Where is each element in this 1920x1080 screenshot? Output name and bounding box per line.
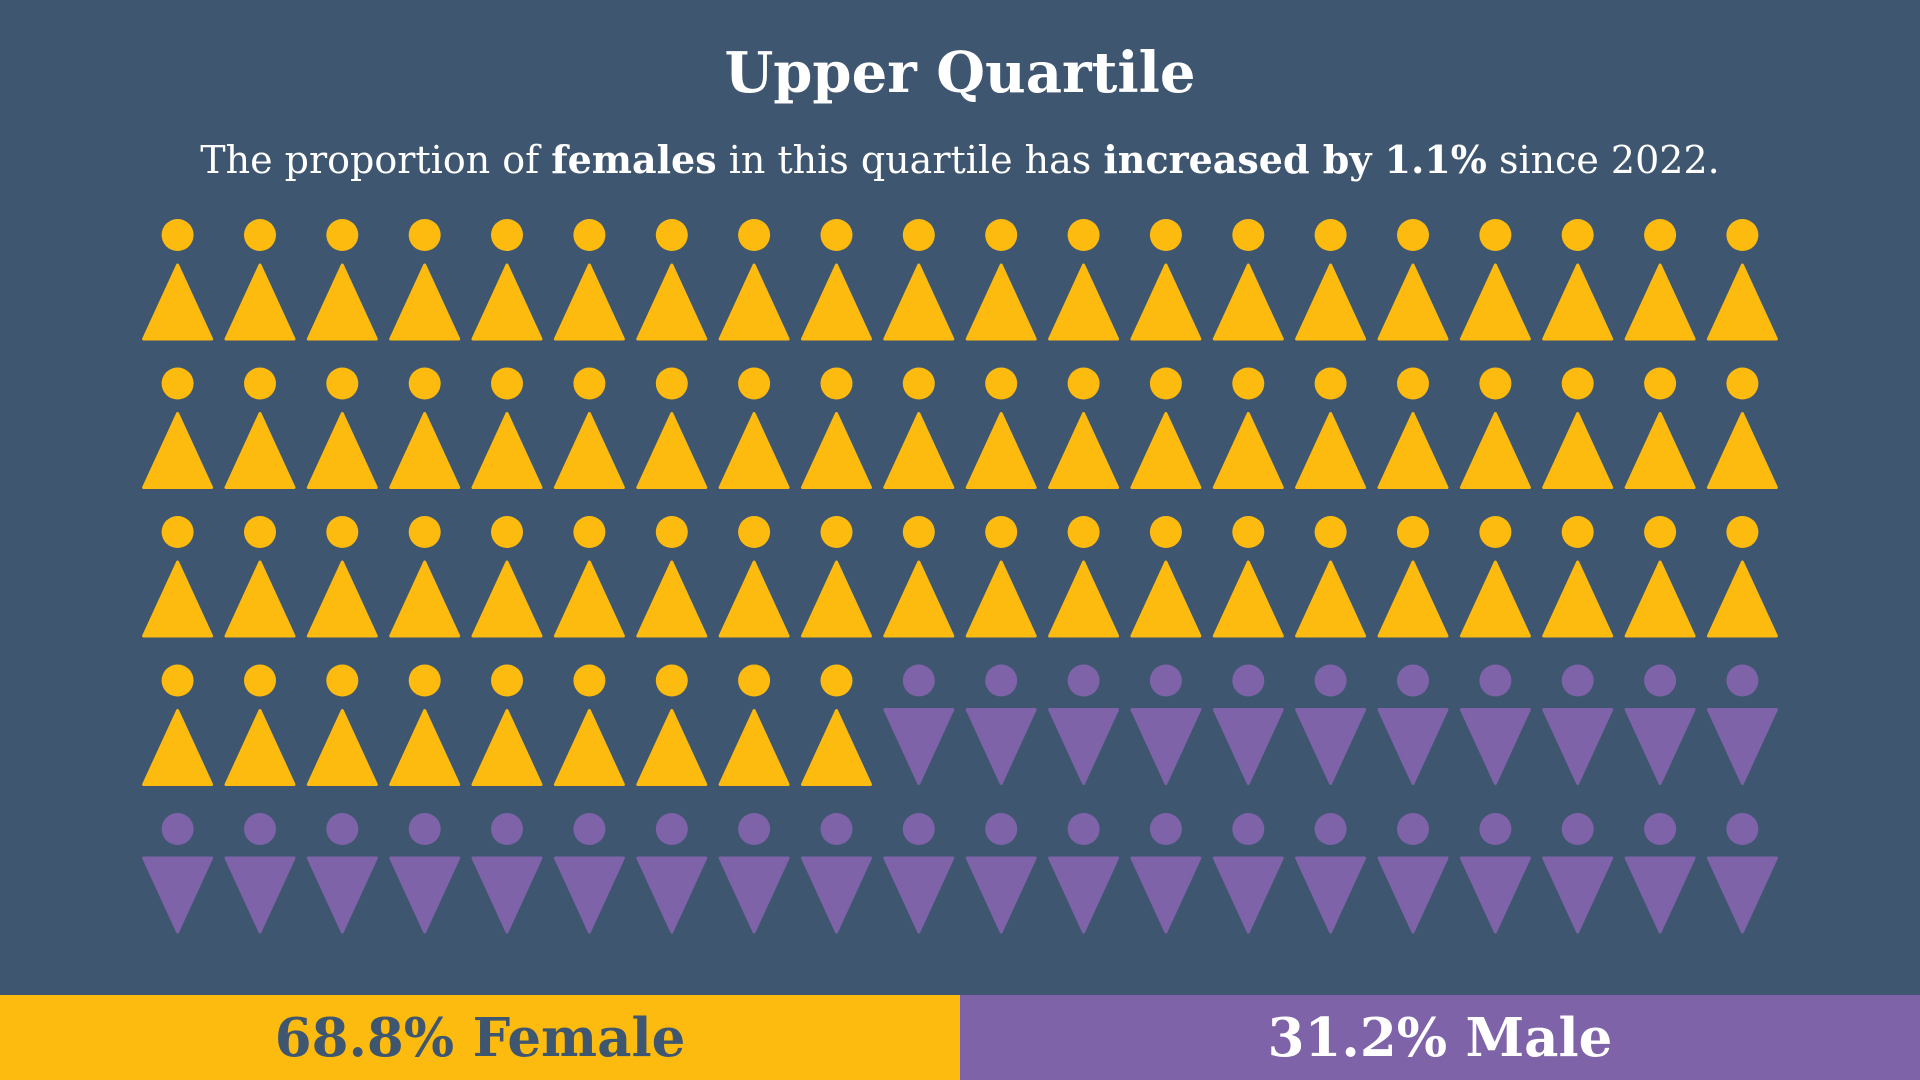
male bar: 31.2% Male <box>1268 1006 1612 1068</box>
male bar <box>960 995 1920 1080</box>
female bar <box>0 995 960 1080</box>
subtitle: The proportion of females in this quartile has increased by 1.1% since 2022. <box>200 137 1720 182</box>
female bar: 68.8% Female <box>275 1006 685 1068</box>
title: Upper Quartile <box>724 40 1196 106</box>
